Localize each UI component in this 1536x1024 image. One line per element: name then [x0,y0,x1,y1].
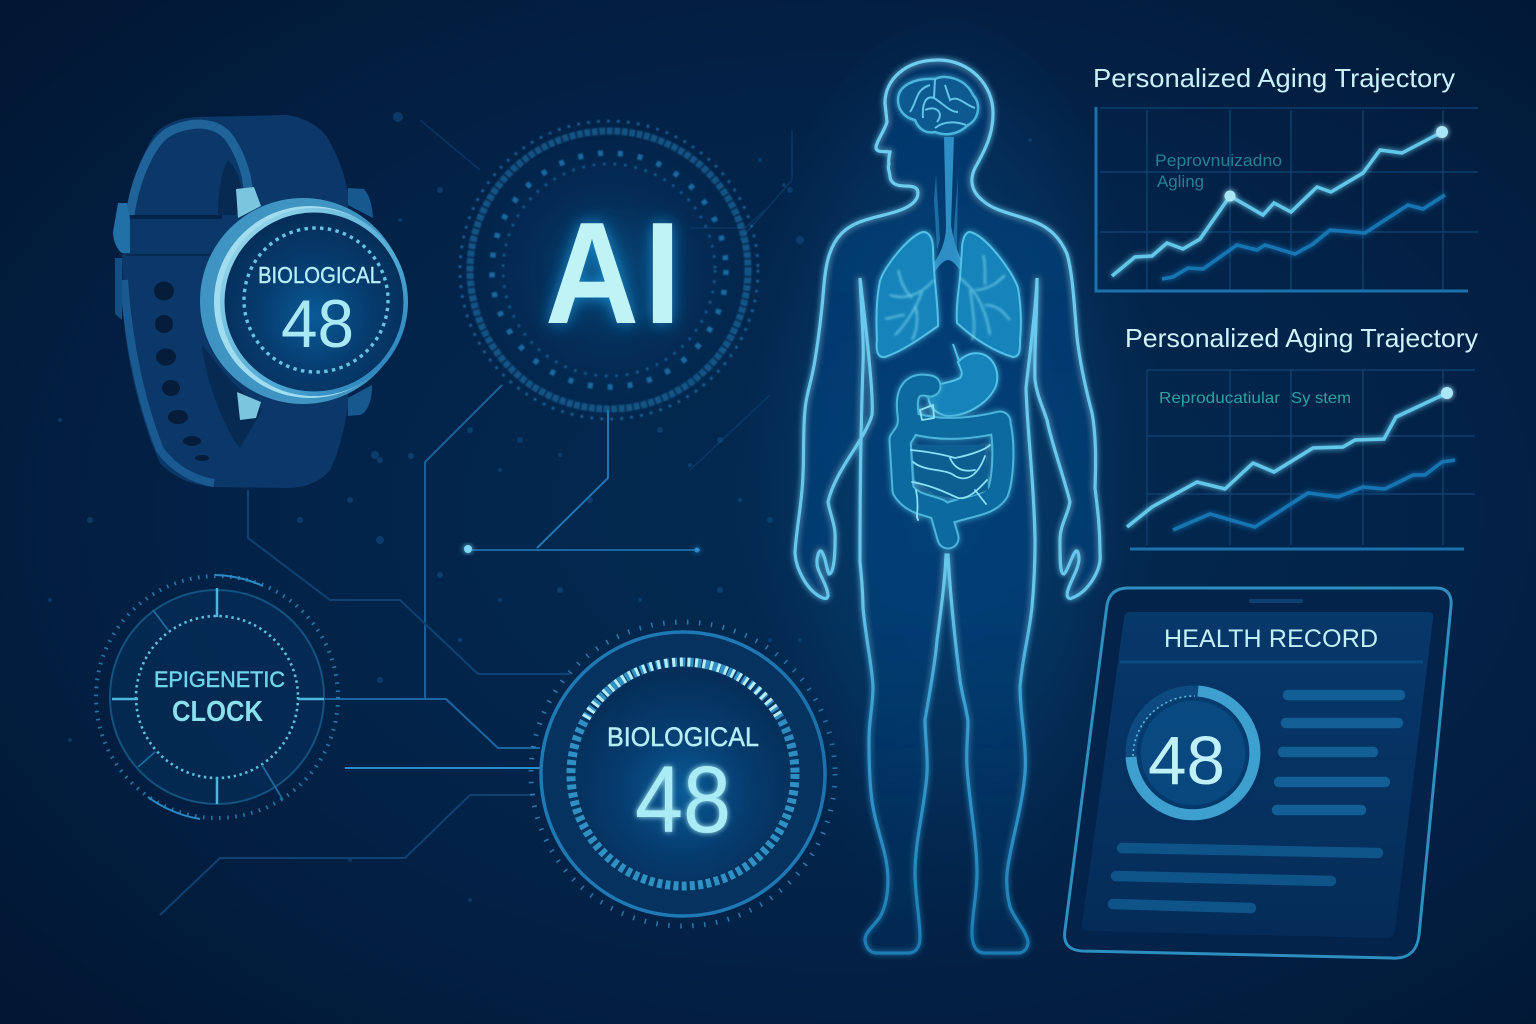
watch bezel [200,198,408,404]
tablet record lines [1113,695,1400,908]
watch strap loop [113,203,222,320]
watch strap holes [154,282,209,461]
dial text: BIOLOGICAL: BIOLOGICAL [607,722,759,752]
lungs [876,232,1021,357]
chart: personalized aging trajectory, bottom [1125,323,1478,549]
secondary trend line [1173,460,1455,530]
biological age dial [531,622,835,926]
clock tick marks [112,588,324,804]
watch lugs [236,187,373,420]
circuit node [464,545,700,553]
circuit lines connecting the modules [160,272,700,915]
tablet progress ring [1131,691,1255,815]
clock text: CLOCK [172,696,263,728]
watch text: 48: 48 [281,286,354,362]
epigenetic clock [96,575,338,819]
chart axes [1096,107,1468,291]
dial text: 48: 48 [635,747,731,853]
human body [733,20,1163,980]
chart label: Sy stem [1291,390,1351,407]
chart axis [1130,548,1464,550]
trachea and spine [930,137,966,272]
tablet: health record [1065,588,1451,958]
brain [898,77,978,134]
chart title: Personalized Aging Trajectory [1125,323,1478,353]
AI label: I [644,192,681,354]
AI label: A [545,192,639,354]
chart label: Reproducatiular [1159,390,1281,407]
tablet score: 48 [1148,722,1225,799]
secondary trend line [1162,195,1445,279]
lung branches [885,255,1010,340]
clock text [154,667,285,728]
clock text: EPIGENETIC [154,667,285,692]
intestines [900,385,1003,538]
chart labels: Agling [1157,172,1204,191]
watch strap [122,115,348,488]
tablet heading: HEALTH RECORD [1164,625,1378,653]
tablet speaker [1249,599,1303,603]
tablet body [1065,588,1451,958]
stomach [928,344,997,416]
data point marker [1441,387,1453,399]
data point markers [1224,126,1448,202]
watch text: BIOLOGICAL: BIOLOGICAL [258,262,381,288]
chart labels [1155,151,1282,191]
smartwatch [113,115,408,488]
chart label [1159,390,1351,407]
AI circle [460,121,758,419]
tablet screen [1082,612,1433,938]
chart labels: Peprovnuizadno [1155,151,1282,170]
chart: personalized aging trajectory, top [1093,63,1478,291]
chart title: Personalized Aging Trajectory [1093,63,1455,93]
primary trend line [1127,393,1447,527]
primary trend line [1112,132,1442,276]
watch dotted ring [244,228,388,372]
body outline [795,60,1100,953]
